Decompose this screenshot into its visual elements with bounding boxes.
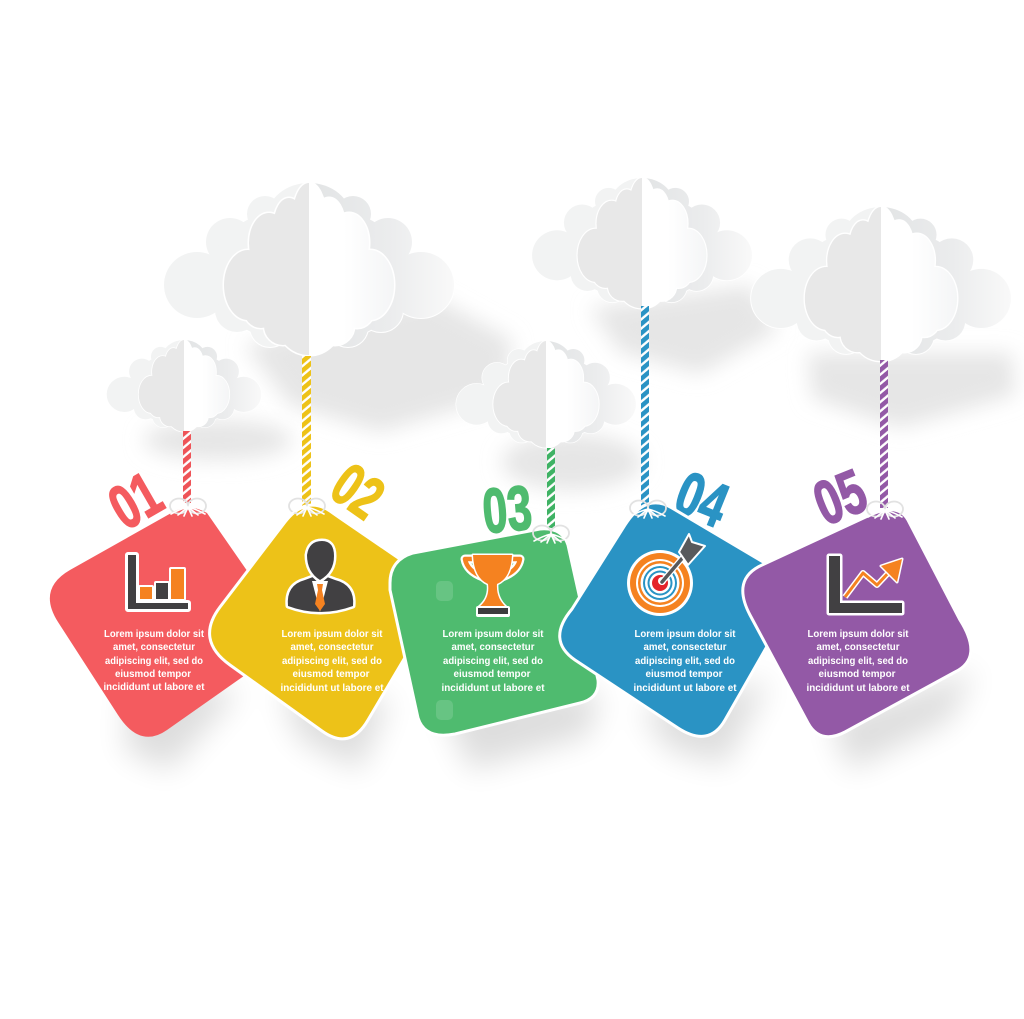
- text block 5: amet, consectetur: [816, 641, 900, 653]
- card shadows: [125, 670, 975, 770]
- text block 4: adipiscing elit, sed do: [635, 655, 735, 667]
- text block 4: incididunt ut labore et: [634, 682, 737, 694]
- icon: bar chart: [128, 555, 188, 609]
- string 1: [183, 431, 191, 503]
- panel: step 04: [560, 306, 802, 736]
- card 5: [743, 510, 971, 737]
- bow 4: [630, 500, 666, 518]
- text block 5: incididunt ut labore et: [806, 682, 910, 694]
- icon: trophy: [465, 555, 520, 617]
- cloud 3: [456, 341, 636, 448]
- string 4: [641, 306, 649, 508]
- watermark marks: [436, 581, 453, 720]
- cloud 2: [164, 183, 454, 355]
- icon: businessman: [288, 541, 353, 612]
- number 01: 01: [98, 460, 174, 543]
- text block 1: amet, consectetur: [113, 641, 195, 653]
- text block 3: eiusmod tempor: [454, 668, 530, 680]
- text block 4: eiusmod tempor: [646, 668, 722, 680]
- card 2: [210, 505, 445, 739]
- cloud 4: [532, 178, 752, 308]
- text block 2: Lorem ipsum dolor sit: [282, 628, 383, 640]
- text block 5: adipiscing elit, sed do: [808, 655, 908, 667]
- icon: growth chart: [829, 556, 902, 613]
- card 4: [560, 503, 802, 736]
- text block 3: Lorem ipsum dolor sit: [442, 628, 544, 640]
- text block 2: incididunt ut labore et: [280, 682, 384, 694]
- card 3: [390, 529, 598, 735]
- text block 2: [280, 628, 384, 694]
- text block 3: [442, 628, 545, 694]
- text block 1: eiusmod tempor: [115, 668, 191, 680]
- string 2: [302, 356, 311, 506]
- text block 2: adipiscing elit, sed do: [282, 655, 382, 667]
- cloud 1: [107, 340, 261, 432]
- panel: step 01: [50, 431, 295, 737]
- cloud 5: [751, 207, 1011, 361]
- text block 5: [806, 628, 910, 694]
- number 04: 04: [666, 459, 738, 541]
- panel: step 05: [743, 360, 971, 737]
- bow 1: [170, 498, 206, 516]
- panel: step 03: [390, 448, 598, 735]
- text block 5: Lorem ipsum dolor sit: [808, 628, 909, 640]
- card 1: [50, 508, 295, 737]
- icon: target with arrow: [627, 534, 705, 616]
- text block 2: eiusmod tempor: [292, 668, 370, 680]
- text block 3: amet, consectetur: [452, 641, 534, 653]
- bow 3: [533, 526, 569, 543]
- text block 1: incididunt ut labore et: [104, 681, 205, 693]
- panel: step 02: [210, 356, 445, 739]
- bow 2: [289, 498, 325, 516]
- string 5: [880, 360, 888, 508]
- string 3: [547, 448, 555, 532]
- number 02: 02: [320, 450, 396, 532]
- text block 2: amet, consectetur: [290, 641, 374, 653]
- text block 1: Lorem ipsum dolor sit: [104, 628, 204, 640]
- text block 5: eiusmod tempor: [818, 668, 896, 680]
- text block 1: adipiscing elit, sed do: [105, 655, 203, 667]
- cloud shadows: [144, 285, 1015, 490]
- number 03: 03: [480, 472, 535, 547]
- text block 4: [634, 628, 737, 694]
- text block 3: incididunt ut labore et: [442, 682, 545, 694]
- text block 1: [104, 628, 205, 693]
- text block 4: amet, consectetur: [644, 641, 726, 653]
- text block 4: Lorem ipsum dolor sit: [634, 628, 736, 640]
- bow 5: [867, 502, 903, 519]
- number 05: 05: [804, 457, 876, 539]
- text block 3: adipiscing elit, sed do: [443, 655, 543, 667]
